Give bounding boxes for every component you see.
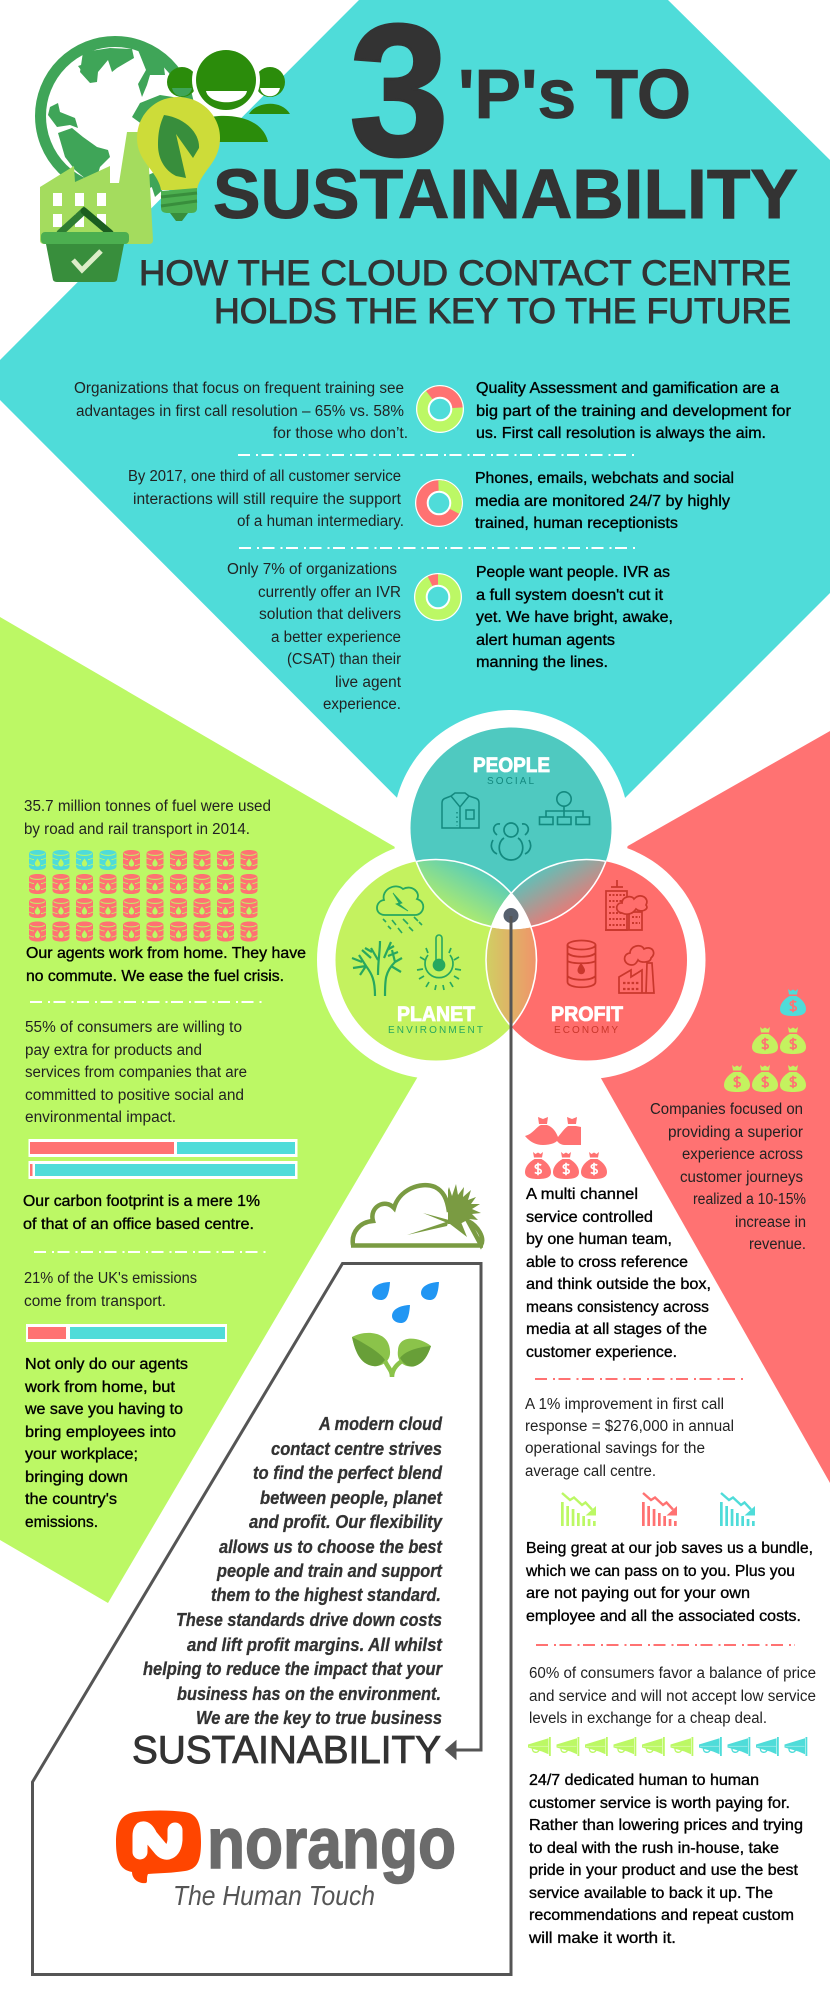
title: 'P's TO [458,55,691,133]
text: work from home: bring employees into [25,1424,176,1441]
text: IVR answer: People want people. IVR as [476,564,670,581]
text: human intermediary stat: interactions will still require the support [133,491,402,508]
text: IVR stat: a better experience [271,629,401,646]
text: first call stat: A 1% improvement in first call [525,1396,724,1413]
chart: donut 33 percent [415,479,463,527]
chart: revenue money bags [724,989,806,1092]
icon: org chart [540,792,590,824]
text: IVR stat: Only 7% of organizations [227,561,397,578]
text: human service: service available to back it up. The [529,1885,773,1902]
panel: teal people background [0,0,830,912]
text: multi channel: A multi channel [526,1186,638,1203]
icon: group [491,823,531,860]
text: revenue stat [650,1101,806,1253]
text: summary paragraph: helping to reduce the impact that your [143,1658,444,1679]
text: summary paragraph: allows us to choose the best [219,1536,443,1557]
text: work from home: we save you having to [24,1401,183,1418]
text: fuel stat [24,798,271,838]
text: revenue stat: revenue. [749,1236,806,1253]
label: planet [388,1003,483,1036]
label: profit: ECONOMY [554,1025,618,1036]
text: revenue stat: increase in [735,1214,806,1231]
icon: people [167,46,290,142]
text: work from home: the country's [25,1491,117,1508]
text: IVR answer: yet. We have bright, awake, [476,609,673,626]
icon: cloud and sun [351,1184,483,1246]
title [213,0,798,233]
divider [535,1378,746,1380]
icon: oil barrel [568,940,596,987]
text: revenue stat: realized a 10-15% [693,1191,806,1208]
text: no commute: no commute. We ease the fuel crisis. [26,968,284,985]
tagline: The Human Touch [173,1880,375,1911]
text: monitoring answer [475,470,734,532]
text: first call stat: response = $276,000 in annual [525,1418,734,1435]
text: training stat [74,380,408,442]
text: IVR answer: alert human agents [476,632,615,649]
chart: red money bags [525,1117,607,1179]
panel: lime planet background [0,617,420,1603]
text: multi channel: means consistency across [526,1299,709,1316]
text: revenue stat: providing a superior [668,1124,803,1141]
venn diagram [317,710,706,1079]
text: savings: employee and all the associated costs. [526,1608,801,1625]
text: human service [528,1772,803,1947]
text: consumers stat [25,1019,247,1126]
text: multi channel: service controlled [526,1209,653,1226]
text: summary paragraph: These standards drive down costs [176,1609,442,1630]
text: savings: Being great at our job saves us a bundle, [526,1540,813,1557]
divider [239,547,635,549]
frame and connector line [32,916,511,1974]
text: fuel stat: by road and rail transport in 2014. [24,821,250,838]
text: savings: are not paying out for your own [526,1585,750,1602]
text: human service: Rather than lowering prices and trying [529,1817,803,1834]
chart: 21 percent bar [26,1324,227,1342]
text: carbon footprint: Our carbon footprint is a mere 1% [23,1193,260,1210]
subtitle: HOW THE CLOUD CONTACT CENTRE [139,254,791,293]
text: IVR stat: currently offer an IVR [258,584,401,601]
overlap: people and planet [416,858,512,926]
text: human service: to deal with the rush in-house, take [529,1840,779,1857]
icon: light bulb [137,97,220,221]
text: human service: 24/7 dedicated human to human [529,1772,759,1789]
icon: city pollution [605,880,647,930]
overlap: planet and profit [485,894,536,1026]
divider [34,1251,269,1253]
circle: planet [336,860,536,1060]
text: work from home: bringing down [25,1469,128,1486]
label: people [473,754,550,787]
text: training stat: Organizations that focus on frequent training see [74,380,404,397]
text: price and service stat: levels in exchange for a cheap deal. [529,1710,767,1727]
icon: basket [41,211,129,282]
text: human service: will make it worth it. [528,1930,676,1947]
text: consumers stat: pay extra for products and [25,1042,202,1059]
chart: megaphone pictogram [528,1737,807,1756]
text: IVR stat: experience. [323,696,401,713]
connector dot [504,908,518,923]
text: training answer [476,380,791,442]
label: people: PEOPLE [473,754,550,777]
text: price and service stat [529,1665,816,1727]
text: human intermediary stat [128,468,404,530]
text: training stat: advantages in first call resolution – 65% vs. 58% [76,403,404,420]
text: human service: pride in your product and use the best [529,1862,799,1879]
panel: people stats [74,380,791,713]
text: consumers stat: committed to positive social and [25,1087,244,1104]
text: work from home: your workplace; [25,1446,138,1463]
subtitle: HOLDS THE KEY TO THE FUTURE [214,292,791,331]
text: no commute [26,945,306,985]
text: summary paragraph: between people, planet [260,1487,443,1508]
text: human service: customer service is worth paying for. [529,1795,790,1812]
text: summary paragraph: and lift profit margins. All whilst [187,1634,443,1655]
subtitle [139,254,791,331]
icon: shirt [442,793,479,828]
text: multi channel: media at all stages of the [526,1321,707,1338]
chart: barrel pictogram [29,850,258,942]
text: emissions stat: 21% of the UK's emissions [24,1270,197,1287]
text: work from home [24,1356,188,1531]
icon: rain drops [372,1282,439,1323]
text: consumers stat: 55% of consumers are willing to [25,1019,242,1036]
wordmark: norango [207,1804,456,1884]
white ring [317,710,706,1079]
text: summary paragraph: contact centre strives [271,1438,442,1459]
chart: donut 65 percent [416,385,464,433]
panel: profit stats [525,989,816,1947]
title: SUSTAINABILITY [213,155,798,233]
text: revenue stat: Companies focused on [650,1101,803,1118]
text: training answer: us. First call resolution is always the aim. [476,425,766,442]
overlap: people and profit [491,858,606,926]
logo: norango [116,1804,456,1911]
label: profit [551,1003,623,1036]
icon: globe [40,42,197,197]
text: consumers stat: environmental impact. [25,1109,176,1126]
text: first call stat [525,1396,734,1480]
divider [238,454,634,456]
text: first call stat: operational savings for the [525,1440,705,1457]
text: multi channel: and think outside the box, [526,1276,711,1293]
text: emissions stat: come from transport. [24,1293,166,1310]
text: revenue stat: customer journeys [680,1169,803,1186]
label: profit: PROFIT [551,1003,623,1026]
icon: falling cost charts [561,1493,755,1526]
text: IVR stat: live agent [335,674,402,691]
overlap: centre [492,894,530,928]
text: fuel stat: 35.7 million tonnes of fuel were used [24,798,271,815]
text: carbon footprint [23,1193,260,1233]
text: human intermediary stat: of a human intermediary. [237,513,404,530]
circle: people [410,728,612,928]
text: training answer: big part of the training and development for [476,403,791,420]
icon: sprout [352,1333,431,1377]
text: summary paragraph: them to the highest standard. [211,1584,441,1605]
text: human service: recommendations and repeat custom [529,1907,794,1924]
text: IVR answer: a full system doesn't cut it [476,587,664,604]
text: work from home: work from home, but [24,1379,176,1396]
divider [536,1644,795,1646]
text: IVR answer: manning the lines. [476,654,608,671]
text: no commute: Our agents work from home. They have [26,945,306,962]
text: training answer: Quality Assessment and gamification are a [476,380,779,397]
text: multi channel: customer experience. [526,1344,677,1361]
chart: 55 percent bar [28,1139,298,1157]
text: savings: which we can pass on to you. Plus you [525,1563,795,1580]
label: planet: PLANET [397,1003,475,1026]
text: price and service stat: and service and will not accept low service [529,1688,816,1705]
text: work from home: Not only do our agents [25,1356,188,1373]
label: planet: ENVIRONMENT [388,1025,483,1036]
text: summary paragraph: to find the perfect blend [253,1462,443,1483]
text: revenue stat: experience across [682,1146,803,1163]
text: multi channel [526,1186,711,1361]
panel: planet stats [23,798,306,1531]
icon: thermometer sun [417,935,461,990]
text: carbon footprint: of that of an office based centre. [23,1216,254,1233]
text: summary paragraph: SUSTAINABILITY [132,1729,441,1772]
text: IVR answer [476,564,673,671]
text: multi channel: by one human team, [526,1231,672,1248]
text: summary paragraph [132,1413,444,1772]
text: IVR stat [227,561,402,713]
circle: profit [486,860,687,1060]
text: consumers stat: services from companies that are [25,1064,247,1081]
text: monitoring answer: trained, human receptionists [475,515,678,532]
text: summary paragraph: business has on the environment. [177,1683,441,1704]
icon: tree [352,941,402,996]
text: summary paragraph: A modern cloud [318,1413,443,1434]
panel: red profit background [598,731,830,1483]
chart: donut 7 percent [414,573,462,621]
text: summary paragraph: We are the key to true business [196,1707,442,1728]
text: emissions stat [24,1270,197,1310]
icon: speech bubble [116,1810,201,1883]
divider [30,1001,265,1003]
text: monitoring answer: media are monitored 24/7 by highly [475,493,730,510]
chart: 1 percent bar [28,1161,298,1179]
text: summary paragraph: and profit. Our flexibility [249,1511,444,1532]
text: human intermediary stat: By 2017, one third of all customer service [128,468,401,485]
text: price and service stat: 60% of consumers favor a balance of price [529,1665,816,1682]
text: work from home: emissions. [25,1514,98,1531]
icon: sustainability cluster [40,42,290,282]
icon: factory [40,132,153,244]
text: IVR stat: (CSAT) than their [287,651,401,668]
label: people: SOCIAL [487,776,534,787]
text: multi channel: able to cross reference [526,1254,688,1271]
text: IVR stat: solution that delivers [259,606,401,623]
icon: factory pollution [619,946,654,993]
text: first call stat: average call centre. [525,1463,656,1480]
text: training stat: for those who don’t. [273,425,408,442]
icon: storm cloud [377,886,423,933]
text: summary paragraph: people and train and support [216,1560,443,1581]
text: monitoring answer: Phones, emails, webchats and social [475,470,734,487]
text: savings [525,1540,813,1625]
